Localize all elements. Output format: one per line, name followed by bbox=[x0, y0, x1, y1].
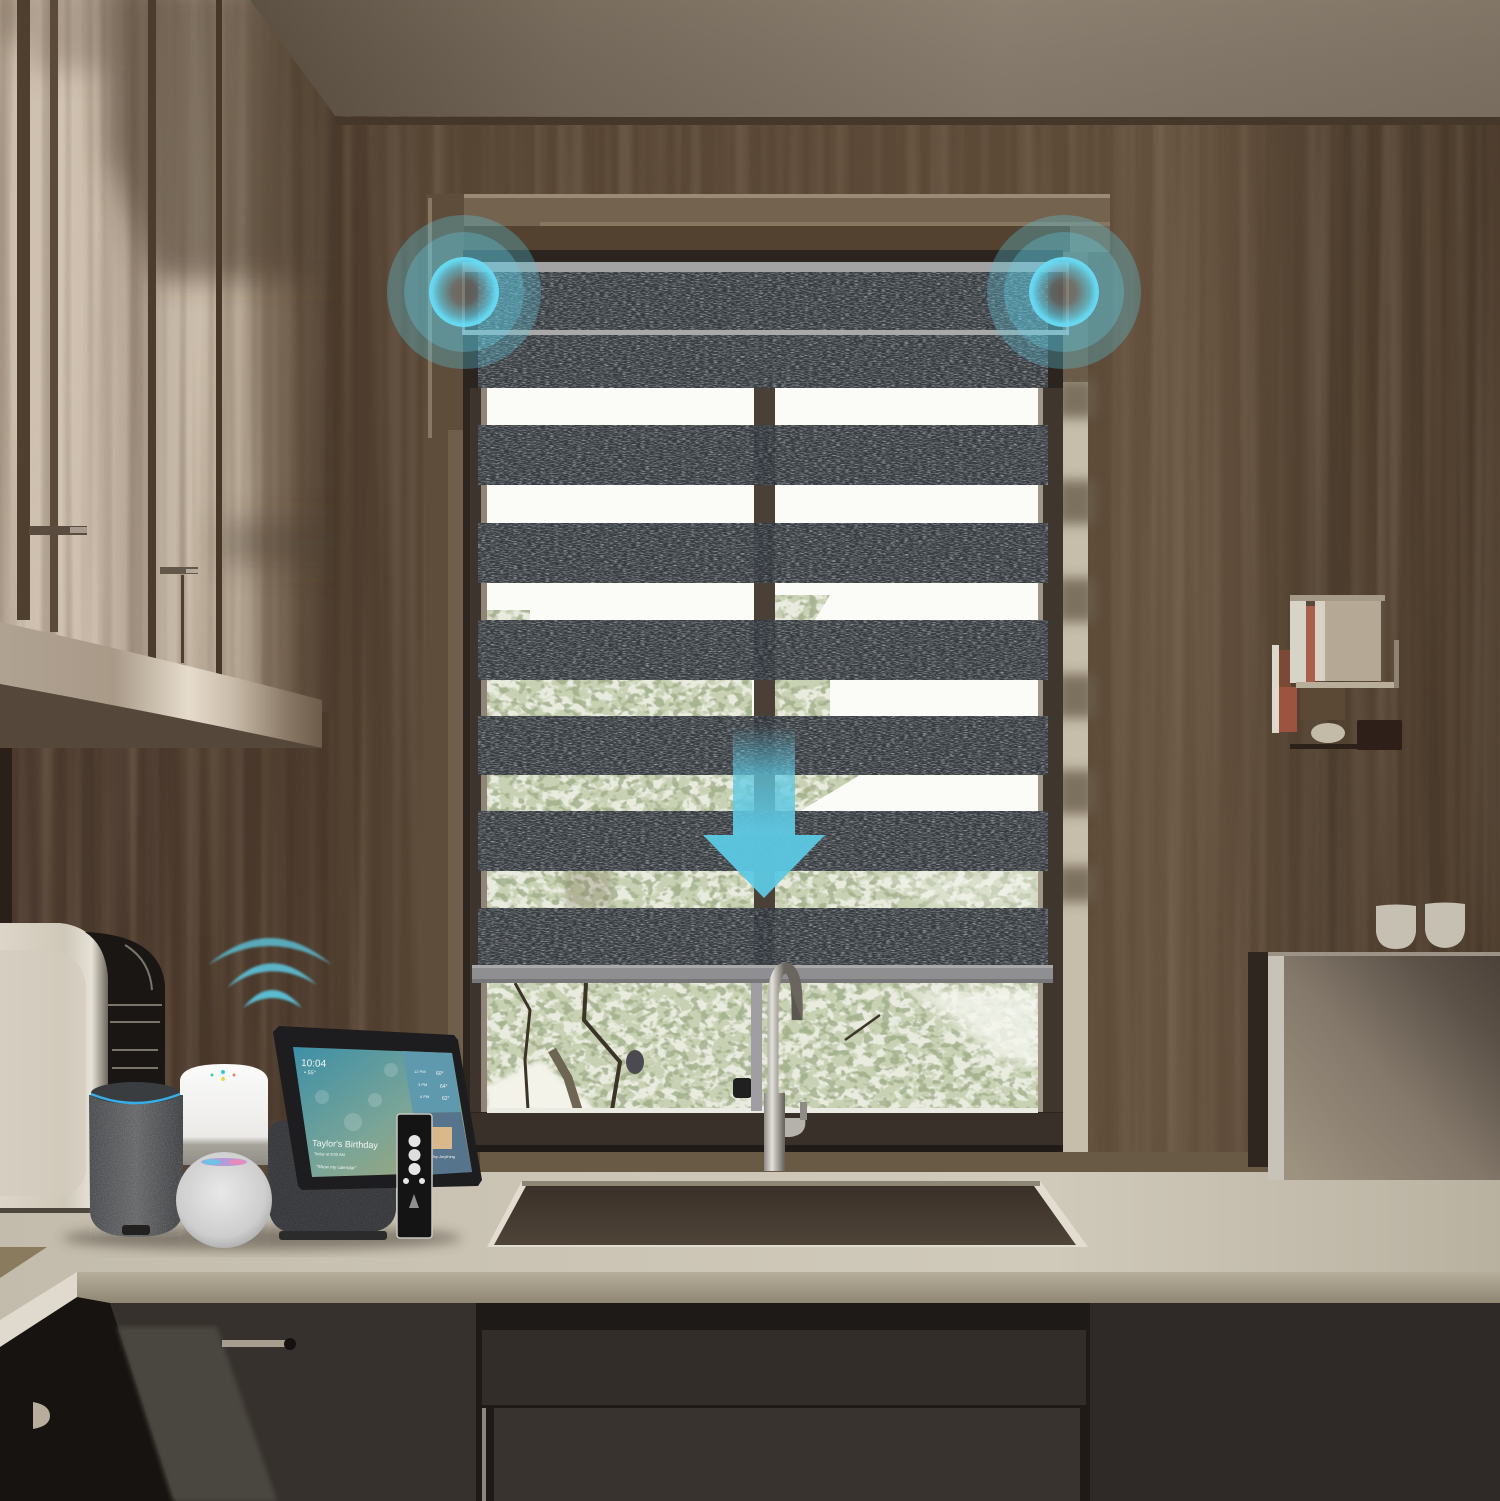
counter box bbox=[1248, 952, 1500, 1180]
center drawer panel bbox=[476, 1303, 1090, 1501]
right signal rings bbox=[996, 224, 1132, 360]
remote control bbox=[397, 1114, 432, 1238]
screen text: 64° bbox=[440, 1084, 448, 1090]
window frame bbox=[463, 250, 1063, 1150]
lit door area bbox=[117, 1327, 277, 1501]
wall shelf with books bbox=[1272, 595, 1402, 750]
cabinet handles bbox=[29, 526, 198, 574]
wifi symbol bbox=[208, 938, 332, 1008]
toaster appliance bbox=[0, 923, 165, 1213]
device shadow bbox=[62, 1226, 462, 1250]
window trim bbox=[426, 194, 1110, 1154]
screen text: Top Anything bbox=[432, 1154, 455, 1159]
screen bokeh bbox=[315, 1063, 398, 1131]
screen text: 62° bbox=[442, 1096, 450, 1102]
homepod mini bbox=[176, 1152, 272, 1248]
screen text: Taylor's Birthday bbox=[312, 1138, 378, 1150]
screen text: 3 PM bbox=[418, 1082, 427, 1087]
arrow: blind moving down bbox=[703, 725, 825, 898]
countertop bbox=[0, 1172, 1500, 1320]
screen text: 60° bbox=[436, 1071, 444, 1077]
bright sky patch bbox=[900, 990, 1040, 1070]
screen text bbox=[301, 1058, 455, 1170]
screen text: • 55° bbox=[304, 1070, 316, 1076]
display body bbox=[273, 1026, 482, 1190]
light ring bbox=[91, 1082, 179, 1104]
tree branches bbox=[515, 871, 880, 1110]
background wall bbox=[0, 100, 1500, 1200]
display screen bbox=[293, 1047, 472, 1177]
counter corner edge bbox=[0, 1247, 77, 1347]
upper cabinets bbox=[0, 0, 350, 748]
screen text: 12 PM bbox=[414, 1069, 426, 1074]
screen text: Today at 9:00 AM bbox=[314, 1151, 345, 1157]
screen text: 6 PM bbox=[420, 1094, 429, 1099]
screen text: "Show my calendar" bbox=[316, 1164, 357, 1170]
lower cabinets bbox=[0, 1297, 1500, 1501]
blind head rail bbox=[462, 262, 1069, 335]
cabinet bottom shelf bbox=[0, 622, 322, 748]
display base bbox=[267, 1120, 396, 1233]
foliage outside window bbox=[487, 590, 1040, 1115]
cabinet knob bbox=[33, 1402, 50, 1429]
zebra blind fabric bbox=[478, 270, 1048, 970]
counter sill bbox=[480, 1152, 1270, 1172]
ceiling bbox=[250, 0, 1500, 125]
echo show smart display bbox=[267, 1026, 482, 1240]
google home speaker bbox=[180, 1064, 268, 1165]
faucet bbox=[764, 968, 807, 1171]
cabinet light falloff bbox=[0, 0, 350, 565]
cups bbox=[1376, 902, 1465, 949]
window glass bbox=[487, 388, 1038, 1112]
dark shapes behind glass bbox=[626, 1050, 644, 1074]
left signal rings bbox=[396, 224, 532, 360]
drawer handle bbox=[222, 1338, 296, 1350]
screen text: 10:04 bbox=[301, 1058, 327, 1070]
sink bbox=[487, 1181, 1088, 1247]
right reveal with blind shadows bbox=[1056, 252, 1096, 1152]
window mullion bbox=[463, 388, 1063, 1152]
blind bottom rail bbox=[472, 965, 1053, 983]
echo speaker bbox=[89, 1082, 183, 1237]
